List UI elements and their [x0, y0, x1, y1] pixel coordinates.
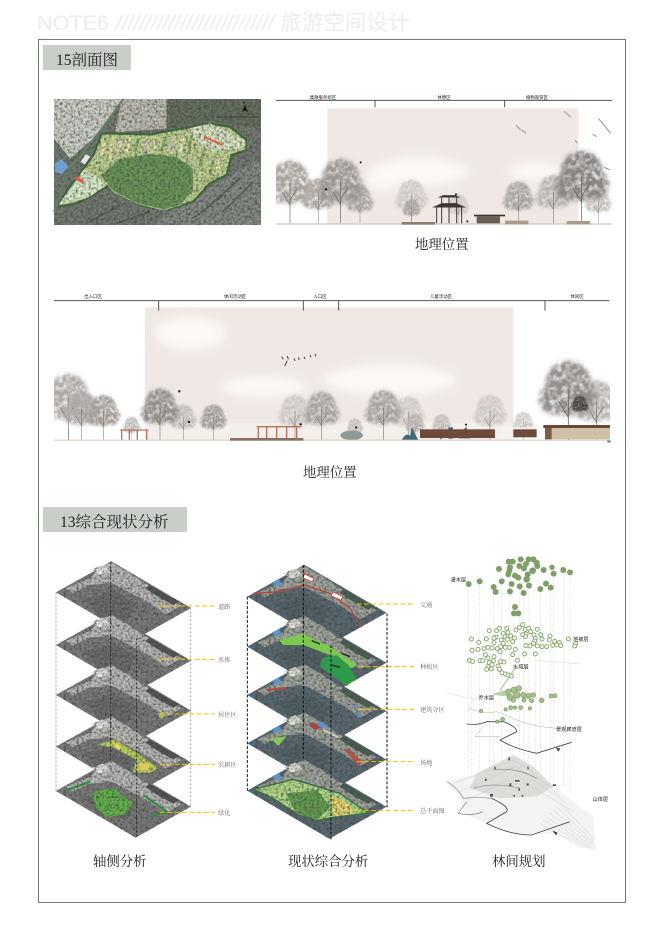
ground line	[54, 438, 611, 442]
heading bar with ticks	[276, 100, 612, 107]
colour stack labels: 交通	[420, 601, 432, 609]
vertical dashed guides	[56, 562, 191, 838]
elevation markers	[178, 390, 467, 428]
page title	[37, 10, 410, 35]
icon: north arrow and scale: N	[243, 101, 246, 105]
forest layer labels: 景观廊道层	[556, 725, 582, 733]
section 1 zone labels: 集散服务组区	[310, 94, 337, 101]
section 2 zone labels	[84, 293, 584, 300]
forest layer labels: 地被层	[573, 635, 589, 643]
vertical dashed guides	[247, 565, 387, 840]
heading: 15 section	[43, 45, 131, 70]
section 1 zone labels	[310, 94, 549, 101]
shrub dots	[466, 556, 573, 616]
layer: residential	[56, 664, 191, 742]
farmland top left	[54, 99, 261, 225]
forest layer labels: 乔木层	[478, 694, 494, 702]
layer: master plan	[247, 759, 386, 839]
section 2 zone labels: 入口区	[313, 294, 327, 299]
gray stack labels	[218, 603, 237, 817]
birds	[516, 111, 611, 170]
gray stack labels: 水体	[218, 656, 231, 664]
heading bar with ticks	[54, 301, 609, 311]
section 1 zone labels: 休憩区	[437, 94, 451, 101]
colour stack labels: 总平面图	[420, 807, 445, 815]
section 2 zone labels: 儿童活动区	[430, 293, 453, 300]
layer: roads	[56, 561, 191, 639]
colour stack labels: 场地	[420, 759, 432, 767]
forest layer labels	[450, 576, 608, 803]
page title: NOTE6	[37, 10, 109, 35]
caption: section 2: 地理位置	[303, 464, 357, 480]
layer: building zones	[247, 663, 386, 743]
yellow leader lines	[357, 604, 415, 811]
pergolas	[120, 427, 302, 440]
colour stack labels: 建筑分区	[420, 706, 445, 714]
section trees	[267, 151, 612, 223]
layer: water	[56, 614, 191, 692]
page title: ///////////////////////////	[114, 10, 276, 35]
gray stack labels: 居住区	[218, 711, 237, 719]
elevation markers	[325, 161, 468, 222]
caption: section 1: 地理位置	[415, 236, 469, 252]
small building	[474, 215, 505, 224]
yellow leader lines	[158, 606, 215, 812]
children's play equipment	[340, 427, 471, 440]
section 2 zone labels: 出入口区	[84, 293, 102, 300]
dotted drop lines	[469, 572, 570, 793]
pavilion	[433, 195, 465, 223]
layer: traffic	[247, 565, 386, 645]
misty backdrop	[327, 108, 578, 224]
site area	[58, 123, 247, 210]
heading: 13 analysis: 13综合现状分析	[60, 513, 169, 531]
section trees	[44, 361, 619, 440]
ground line	[276, 221, 612, 225]
mountain layer	[447, 755, 596, 852]
forest mountain	[100, 153, 193, 210]
section drawing 2	[44, 301, 619, 442]
forest layer labels: 山体层	[592, 795, 608, 803]
icon: north arrow and scale	[217, 101, 259, 117]
layer: sites	[247, 711, 386, 791]
section drawing 1	[267, 100, 612, 225]
axonometric stack: gray layers	[56, 561, 215, 838]
heading: 15 section: 15剖面图	[56, 51, 118, 69]
heading: 13 analysis	[43, 507, 187, 532]
layer: farmland	[56, 716, 191, 793]
gray stack labels: 绿化	[218, 809, 230, 817]
page title: 旅游空间设计	[280, 10, 410, 35]
arbor layer	[447, 660, 580, 723]
forest layer labels: 灌木层	[450, 576, 466, 584]
layer: planting	[247, 615, 386, 695]
caption: current analysis: 现状综合分析	[288, 853, 368, 869]
birds flock	[282, 354, 316, 366]
site plan map	[54, 99, 261, 225]
gray stack labels: 农耕区	[218, 761, 237, 769]
layer: greenery	[56, 760, 191, 838]
groundcover rings	[467, 623, 578, 678]
red zones	[204, 137, 223, 145]
landscape corridor layer	[467, 708, 572, 753]
section 1 zone labels: 植物观赏区	[526, 94, 549, 101]
caption: axonometric analysis: 轴侧分析	[93, 853, 147, 869]
exploded forest planning diagram	[447, 556, 596, 852]
forest layer labels: 水域层	[513, 662, 529, 670]
section 2 zone labels: 休闲区	[570, 293, 584, 300]
caption: forest planning: 林间规划	[492, 853, 546, 869]
colour stack labels	[420, 601, 445, 815]
colour stack labels: 种植区	[420, 663, 439, 671]
brown buildings	[420, 425, 610, 439]
misty backdrop	[145, 307, 513, 440]
section 2 zone labels: 休闲活动区	[224, 293, 247, 300]
gray stack labels: 道路	[218, 603, 231, 611]
axonometric stack: colour layers	[247, 565, 415, 840]
